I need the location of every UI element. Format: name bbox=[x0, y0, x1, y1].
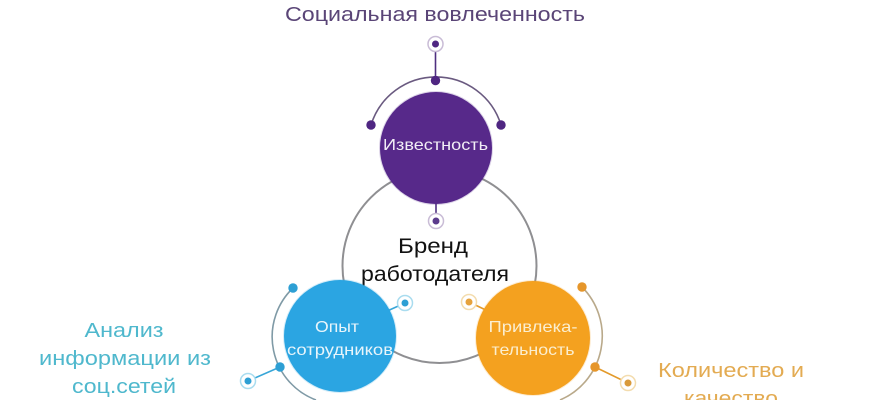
purple connector bottom bbox=[435, 200, 437, 221]
orange connector left bbox=[469, 302, 490, 312]
blue target left bbox=[240, 374, 256, 388]
blue caption: social data analysis: соц.сетей bbox=[72, 376, 176, 398]
orange connector right bbox=[595, 367, 628, 383]
orange label: Привлека- bbox=[488, 319, 578, 336]
blue arc bbox=[272, 288, 316, 400]
purple target top bbox=[428, 36, 443, 52]
orange target left bbox=[462, 294, 476, 310]
blue caption: social data analysis: Анализ bbox=[84, 320, 164, 342]
blue label: Опыт bbox=[315, 319, 360, 336]
blue caption: social data analysis: информации из bbox=[39, 348, 211, 370]
blue node group bbox=[240, 280, 412, 400]
central label: employer brand: работодателя bbox=[361, 263, 509, 286]
blue caption: social data analysis bbox=[39, 320, 211, 398]
orange label: тельность bbox=[492, 342, 574, 359]
purple label: Известность bbox=[383, 137, 488, 154]
central label: employer brand: Бренд bbox=[398, 235, 468, 258]
blue label: сотрудников bbox=[287, 342, 393, 359]
orange circle bbox=[476, 281, 590, 395]
purple circle bbox=[380, 92, 492, 204]
blue connector left bbox=[248, 367, 280, 381]
blue connector right bbox=[385, 303, 405, 312]
orange arc bbox=[560, 287, 602, 400]
blue circle bbox=[284, 280, 396, 392]
blue target right bbox=[398, 296, 412, 310]
blue arc dots bbox=[275, 283, 298, 372]
heading: social engagement: Социальная вовлеченность bbox=[285, 4, 585, 26]
purple node group bbox=[366, 36, 506, 228]
central label: employer brand bbox=[361, 235, 509, 286]
orange label bbox=[488, 319, 578, 359]
purple connector top bbox=[434, 44, 436, 81]
orange arc dots bbox=[577, 282, 600, 372]
orange target right bbox=[620, 376, 636, 390]
purple arc bbox=[371, 77, 501, 125]
orange caption: quantity and quality: Количество и bbox=[658, 360, 804, 382]
purple arc dots bbox=[366, 76, 506, 130]
orange node group bbox=[462, 281, 636, 400]
purple target bottom bbox=[428, 214, 444, 228]
orange caption: quantity and quality bbox=[658, 360, 804, 400]
blue label bbox=[287, 319, 393, 359]
central ring bbox=[342, 169, 536, 363]
